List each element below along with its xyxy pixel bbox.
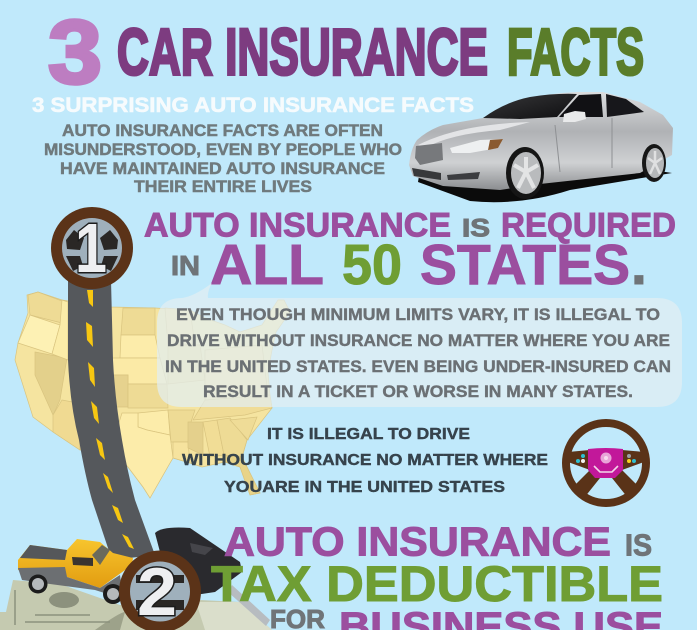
text block: illegal to drive: YOUARE IN THE UNITED STATES [224,479,505,496]
heading: required in all 50 states: ALL [210,233,324,297]
icon: number 2 wheel badge: 2 [137,554,177,630]
title: 3 [48,3,102,103]
intro paragraph: AUTO INSURANCE FACTS ARE OFTEN [62,122,383,140]
icon: number 1 wheel badge: 1 [75,209,107,287]
intro paragraph [44,122,402,196]
text block: minimum limits: DRIVE WITHOUT INSURANCE NO MATTER WHERE YOU ARE [167,331,670,350]
heading: tax deductible for business use: TAX DEDUCTIBLE [211,556,663,612]
callout: translucent speech bubble [157,283,682,407]
map of the United States [15,292,290,498]
icon: yellow pickup truck [18,539,133,604]
text block: illegal to drive: WITHOUT INSURANCE NO MATTER WHERE [182,452,548,469]
text block: illegal to drive: IT IS ILLEGAL TO DRIVE [267,426,470,443]
heading: tax deductible for business use: IS [625,528,652,562]
heading: required in all 50 states: . [631,233,647,297]
text block: minimum limits: RESULT IN A TICKET OR WORSE IN MANY STATES. [203,382,633,401]
heading: required in all 50 states: IN [171,250,200,281]
icon: car key [155,528,270,626]
intro paragraph: MISUNDERSTOOD, EVEN BY PEOPLE WHO [44,141,402,159]
icon: number 2 wheel badge [119,550,201,630]
road [68,280,155,560]
icon: silver car [409,92,673,202]
intro paragraph: HAVE MAINTAINED AUTO INSURANCE [60,160,385,178]
heading: required in all 50 states [144,206,676,297]
title [48,3,644,103]
heading: required in all 50 states: REQUIRED [501,206,676,244]
text block: minimum limits: EVEN THOUGH MINIMUM LIMITS VARY, IT IS ILLEGAL TO [176,305,660,324]
title: CAR INSURANCE [117,14,488,88]
heading: required in all 50 states: STATES [420,233,630,297]
intro paragraph: THEIR ENTIRE LIVES [134,178,312,196]
text block: illegal to drive [182,426,548,496]
text block: minimum limits [165,305,671,401]
heading: tax deductible for business use: AUTO INSURANCE [224,518,611,564]
image: dollar bills [0,580,272,630]
heading: required in all 50 states: 50 [342,233,402,297]
icon: steering wheel [566,423,646,503]
heading: required in all 50 states: IS [462,214,490,242]
text block: minimum limits: IN THE UNITED STATES. EVEN BEING UNDER-INSURED CAN [165,357,671,376]
subtitle: 3 SURPRISING AUTO INSURANCE FACTS [32,94,474,117]
icon: number 1 wheel badge [51,207,133,289]
heading: required in all 50 states: AUTO INSURANCE [144,206,451,244]
heading: tax deductible for business use [211,518,663,630]
